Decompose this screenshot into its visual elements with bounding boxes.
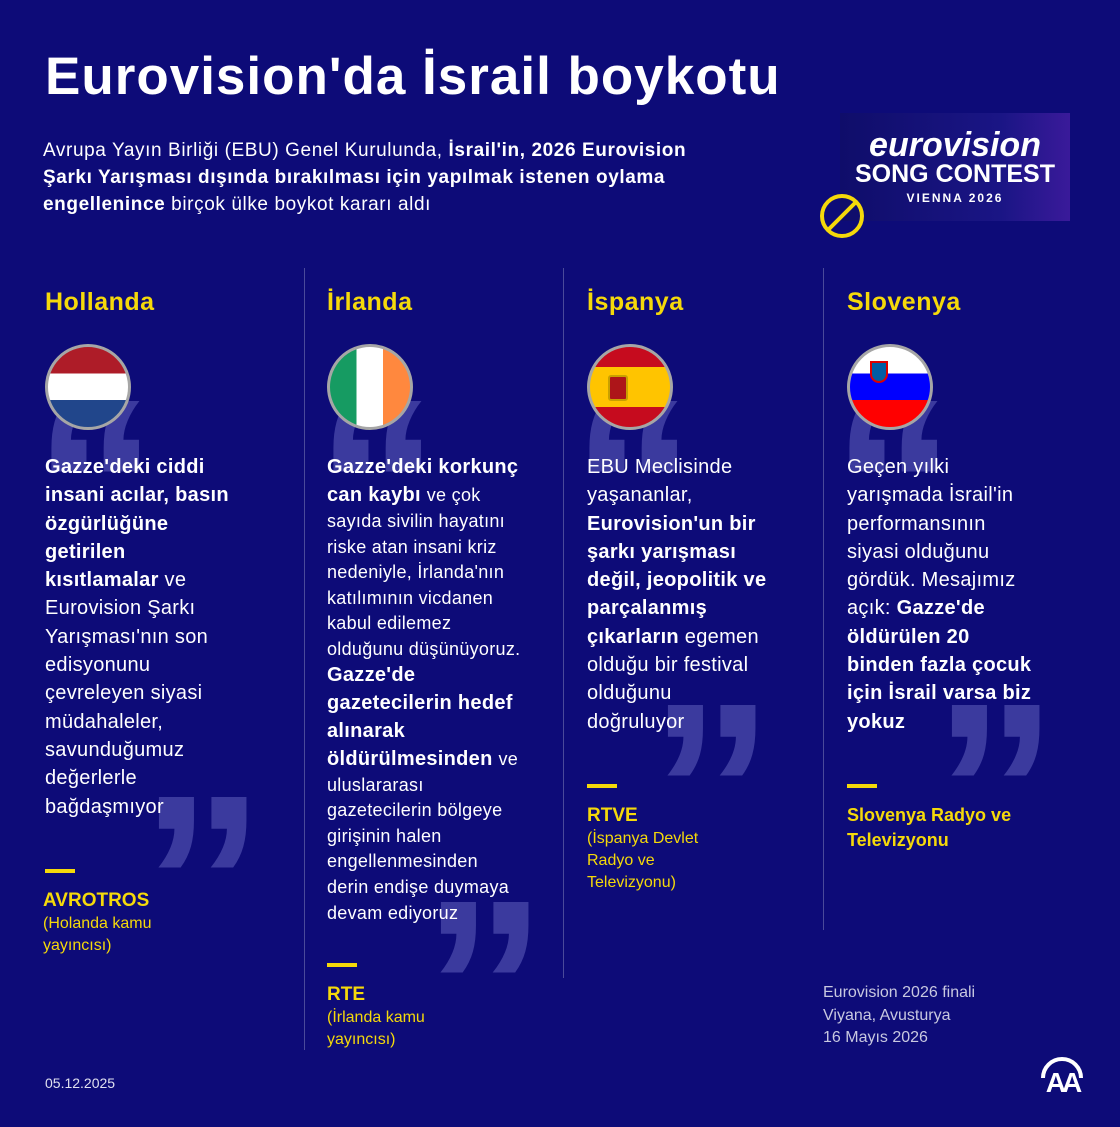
panel: Hollanda: yayıncısı)	[43, 937, 111, 954]
panel: Slovenya: Geçen yılki	[847, 456, 949, 478]
panel: Slovenya: yarışmada İsrail'in	[847, 484, 1013, 506]
title: Eurovision'da İsrail boykotu	[45, 47, 781, 106]
panel: İrlanda: “	[315, 347, 440, 626]
panel: İrlanda: kabul edilemez	[327, 613, 451, 633]
panel: İrlanda: engellenmesinden	[327, 851, 478, 871]
panel: İrlanda: RTE	[327, 984, 365, 1005]
panel: İspanya: olduğunu	[587, 682, 672, 704]
panel: İrlanda: derin endişe duymaya	[327, 877, 509, 897]
panel: Hollanda: Yarışması'nın son	[45, 626, 208, 648]
logo: eurovision	[840, 113, 1070, 221]
flag: Ireland	[327, 344, 413, 430]
panel: İrlanda: ”	[422, 848, 547, 1127]
panel: Hollanda: Eurovision Şarkı	[45, 597, 195, 619]
panel: Slovenya: öldürülen 20	[847, 626, 970, 648]
panel: Hollanda: Hollanda	[45, 288, 155, 316]
panel: İrlanda: can kaybı ve çok	[327, 484, 481, 506]
panel: İspanya: RTVE	[587, 805, 638, 826]
flag: Slovenia	[847, 344, 933, 430]
panel: İspanya: parçalanmış	[587, 597, 707, 619]
panel: Slovenya: Slovenya Radyo ve	[847, 805, 1011, 825]
panel: İspanya: yaşananlar,	[587, 484, 693, 506]
panel: İrlanda: Gazze'de	[327, 664, 415, 686]
panel: İspanya: “	[571, 347, 696, 626]
logo: eurovision: VIENNA 2026	[907, 191, 1003, 205]
intro text: Avrupa Yayın Birliği (EBU) Genel Kurulunda, İsrail'in, 2026 Eurovision	[43, 140, 686, 161]
panel: Slovenya: gördük. Mesajımız	[847, 569, 1016, 591]
panel: İrlanda: yayıncısı)	[327, 1031, 395, 1048]
intro text: engellenince birçok ülke boykot kararı aldı	[43, 194, 431, 215]
panel: İspanya: İspanya	[587, 288, 684, 316]
panel: İspanya: ”	[649, 651, 774, 930]
panel: Hollanda: değerlerle	[45, 767, 137, 789]
panel: İrlanda: nedeniyle, İrlanda'nın	[327, 562, 504, 582]
panel: Slovenya	[831, 288, 1058, 930]
intro text: Şarkı Yarışması dışında bırakılması için yapılmak istenen oylama	[43, 167, 665, 188]
panel: İspanya: EBU Meclisinde	[587, 456, 732, 478]
panel: İrlanda: gazetecilerin bölgeye	[327, 800, 502, 820]
panel: İrlanda: uluslararası	[327, 775, 424, 795]
panel: Hollanda: insani acılar, basın	[45, 484, 229, 506]
logo: eurovision: eurovision	[869, 126, 1041, 164]
panel: İrlanda: devam ediyoruz	[327, 903, 458, 923]
panel: Slovenya: “	[831, 347, 956, 626]
panel: İrlanda: Gazze'deki korkunç	[327, 456, 518, 478]
panel: İrlanda: alınarak	[327, 720, 405, 742]
panel: Hollanda: müdahaleler,	[45, 711, 163, 733]
panel: İrlanda: gazetecilerin hedef	[327, 692, 513, 714]
flag: Spain	[587, 344, 673, 430]
panel: Hollanda: kısıtlamalar ve	[45, 569, 186, 591]
panel: Hollanda: “	[33, 347, 158, 626]
panel: Hollanda: getirilen	[45, 541, 126, 563]
icon: AA logo	[1041, 1057, 1083, 1094]
footer: final info: Viyana, Avusturya	[823, 1006, 950, 1024]
panel: İrlanda: öldürülmesinden ve	[327, 748, 518, 770]
panel: Hollanda: AVROTROS	[43, 890, 149, 911]
panel: İrlanda: (İrlanda kamu	[327, 1009, 425, 1026]
panel: Slovenya: Slovenya	[847, 288, 961, 316]
panel: İspanya: olduğu bir festival	[587, 654, 748, 676]
panel: Slovenya: Televizyonu	[847, 830, 949, 850]
panel: Hollanda: bağdaşmıyor	[45, 796, 164, 818]
flag: Netherlands	[45, 344, 131, 430]
panel: İrlanda: riske atan insani kriz	[327, 537, 497, 557]
footer: final info: 16 Mayıs 2026	[823, 1029, 928, 1046]
panel: İspanya: (İspanya Devlet	[587, 830, 698, 847]
panel: İrlanda: İrlanda	[327, 288, 412, 316]
panel: Hollanda	[33, 288, 265, 1022]
panel: İspanya: doğruluyor	[587, 711, 685, 733]
panel: Hollanda: (Holanda kamu	[43, 915, 152, 932]
panel: İspanya: çıkarların egemen	[587, 626, 759, 648]
panel: İspanya	[571, 288, 774, 930]
panel: Hollanda: özgürlüğüne	[45, 513, 168, 535]
panel: Slovenya: siyasi olduğunu	[847, 541, 989, 563]
panel: İspanya: şarkı yarışması	[587, 541, 736, 563]
panel: İrlanda	[315, 288, 547, 1127]
logo: eurovision: SONG CONTEST	[855, 160, 1055, 188]
panel: İspanya: Radyo ve	[587, 852, 655, 869]
panel: İrlanda: sayıda sivilin hayatını	[327, 511, 505, 531]
intro text	[43, 140, 686, 215]
footer: final info: Eurovision 2026 finali	[823, 984, 975, 1001]
panel: Slovenya: açık: Gazze'de	[847, 597, 985, 619]
panel: Slovenya: binden fazla çocuk	[847, 654, 1031, 676]
panel: Hollanda: çevreleyen siyasi	[45, 682, 202, 704]
panel: Hollanda: savunduğumuz	[45, 739, 184, 761]
panel: Slovenya: performansının	[847, 513, 986, 535]
panel: Slovenya: için İsrail varsa biz	[847, 682, 1031, 704]
panel: İrlanda: katılımının vicdanen	[327, 588, 493, 608]
panel: Slovenya: yokuz	[847, 711, 905, 733]
panel: Hollanda: ”	[140, 743, 265, 1022]
footer: final info	[823, 984, 975, 1046]
icon: prohibition	[820, 194, 864, 238]
panel: Slovenya: ”	[933, 651, 1058, 930]
panel: İrlanda: olduğunu düşünüyoruz.	[327, 639, 520, 659]
panel: İrlanda: girişinin halen	[327, 826, 442, 846]
date: 05.12.2025	[45, 1075, 115, 1091]
panel: İspanya: değil, jeopolitik ve	[587, 569, 766, 591]
panel: İspanya: Eurovision'un bir	[587, 513, 756, 535]
panel: İspanya: Televizyonu)	[587, 874, 676, 891]
panel: Hollanda: edisyonunu	[45, 654, 150, 676]
panel: Hollanda: Gazze'deki ciddi	[45, 456, 205, 478]
